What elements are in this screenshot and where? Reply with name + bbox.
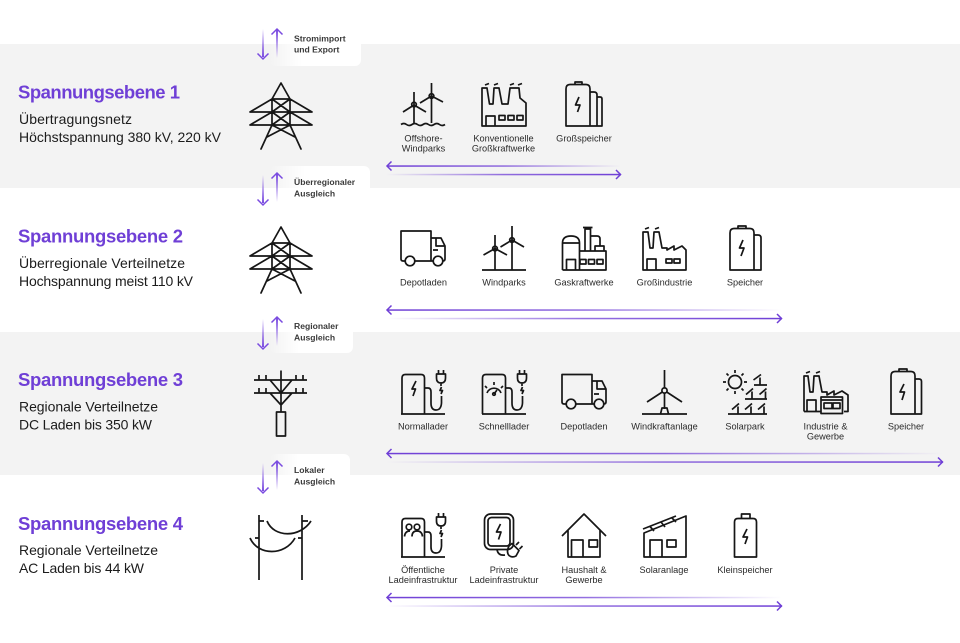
icon: low voltage poles level 4 — [250, 515, 311, 580]
arrows: level 1 range — [386, 162, 621, 179]
heading block: Spannungsebene 1: Höchstspannung 380 kV, 220 kV — [19, 129, 222, 145]
row: level 1 assets — [401, 82, 612, 153]
callout: Regionaler Ausgleich: Regionaler — [294, 321, 339, 331]
label: Haushalt & Gewerbe: Haushalt & — [562, 565, 606, 575]
heading block: Spannungsebene 3: Regionale Verteilnetze — [19, 398, 158, 414]
callout: Lokaler Ausgleich: Ausgleich — [294, 476, 335, 486]
heading block: Spannungsebene 1: Spannungsebene 1 — [18, 82, 180, 102]
callout: Regionaler Ausgleich — [258, 310, 353, 353]
row: level 4 assets — [389, 513, 773, 585]
label: Speicher: Speicher — [727, 278, 763, 288]
callout: Überregionaler Ausgleich — [258, 166, 370, 210]
heading block: Spannungsebene 1: Übertragungsnetz — [19, 110, 132, 127]
icon: wind parks — [482, 226, 526, 270]
label: Private Ladeinfrastruktur: Private — [490, 565, 518, 575]
label: Windparks: Windparks — [482, 278, 526, 288]
label: Industrie & Gewerbe: Gewerbe — [807, 431, 844, 441]
panel: Spannungsebene 1 background — [0, 44, 960, 188]
label: Depotladen: Depotladen — [400, 278, 447, 288]
heading block: Spannungsebene 3: DC Laden bis 350 kW — [19, 416, 153, 432]
panel: Spannungsebene 3 background — [0, 332, 960, 475]
label: Speicher: Speicher — [888, 422, 924, 432]
heading block: Spannungsebene 4: Regionale Verteilnetze — [19, 542, 158, 558]
icon: pylon level 2 — [250, 227, 312, 293]
label: Konventionelle Großkraftwerke: Konventionelle — [473, 134, 534, 144]
label: Kleinspeicher: Kleinspeicher — [717, 565, 773, 575]
label: Depotladen: Depotladen — [560, 422, 608, 432]
callout: Stromimport und Export: Stromimport — [294, 34, 346, 44]
icon: heavy industry — [643, 228, 686, 270]
icon: pylon level 1 — [250, 83, 312, 149]
heading block: Spannungsebene 4 — [18, 513, 184, 576]
icon: distribution pole level 3 — [254, 370, 307, 436]
label: Haushalt & Gewerbe: Gewerbe — [565, 575, 603, 585]
label: Großindustrie: Großindustrie — [637, 278, 692, 288]
arrows: level 2 range — [386, 306, 782, 323]
heading block: Spannungsebene 3: Spannungsebene 3 — [18, 369, 183, 390]
callout: Überregionaler Ausgleich: Ausgleich — [294, 188, 335, 198]
label: Windkraftanlage: Windkraftanlage — [631, 422, 698, 432]
heading block: Spannungsebene 2: Hochspannung meist 110 kV — [19, 273, 194, 289]
callout: Stromimport und Export — [258, 28, 361, 66]
label: Normallader: Normallader — [398, 422, 448, 432]
icon: solar park — [723, 370, 767, 414]
icon: offshore wind parks — [401, 83, 445, 126]
icon: wind turbine — [642, 370, 687, 414]
icon: truck depot — [401, 231, 445, 266]
callout: Lokaler Ausgleich: Lokaler — [294, 465, 325, 475]
row: level 3 assets — [398, 369, 924, 441]
callout: Regionaler Ausgleich: Ausgleich — [294, 332, 335, 342]
icon: battery storage — [891, 369, 922, 414]
icon: public charging — [401, 513, 446, 557]
callout: Stromimport und Export: und Export — [294, 44, 339, 54]
label: Schnelllader: Schnelllader — [479, 422, 529, 432]
icon: fast charger — [482, 370, 526, 414]
label: Öffentliche Ladeinfrastruktur: Öffentliche — [401, 565, 445, 575]
icon: solar installation — [643, 516, 686, 557]
label: Industrie & Gewerbe: Industrie & — [804, 422, 847, 432]
label: Solarpark: Solarpark — [725, 422, 765, 432]
label: Private Ladeinfrastruktur: Ladeinfrastruktur — [470, 575, 538, 585]
heading block: Spannungsebene 2 — [18, 226, 194, 289]
icon: truck depot — [562, 374, 606, 409]
arrows: level 4 range — [386, 593, 782, 610]
arrows: level 3 range — [386, 449, 943, 466]
icon: small battery — [734, 514, 756, 557]
label: Offshore-Windparks: Offshore- — [404, 134, 443, 144]
label: Öffentliche Ladeinfrastruktur: Ladeinfrastruktur — [389, 575, 457, 585]
heading block: Spannungsebene 4: AC Laden bis 44 kW — [19, 560, 145, 576]
icon: industry and commerce — [804, 372, 848, 414]
callout: Überregionaler Ausgleich: Überregionaler — [294, 177, 356, 187]
label: Solaranlage: Solaranlage — [639, 565, 689, 575]
icon: conventional power plants — [482, 84, 526, 126]
icon: large storage battery — [566, 82, 602, 126]
heading block: Spannungsebene 4: Spannungsebene 4 — [18, 513, 184, 534]
label: Großspeicher: Großspeicher — [556, 134, 612, 144]
heading block: Spannungsebene 3 — [18, 369, 183, 432]
label: Offshore-Windparks: Windparks — [402, 143, 446, 153]
heading block: Spannungsebene 1 — [18, 82, 222, 145]
heading block: Spannungsebene 2: Überregionale Verteilnetze — [19, 254, 185, 271]
icon: normal charger — [401, 370, 446, 414]
label: Gaskraftwerke: Gaskraftwerke — [554, 278, 614, 288]
heading block: Spannungsebene 2: Spannungsebene 2 — [18, 226, 183, 246]
callout: Lokaler Ausgleich — [258, 454, 350, 497]
icon: house — [562, 514, 606, 557]
icon: private charging — [484, 514, 522, 557]
icon: battery storage — [730, 226, 761, 270]
icon: gas power plant — [562, 228, 606, 270]
label: Konventionelle Großkraftwerke: Großkraftwerke — [472, 143, 535, 153]
row: level 2 assets — [400, 226, 763, 288]
